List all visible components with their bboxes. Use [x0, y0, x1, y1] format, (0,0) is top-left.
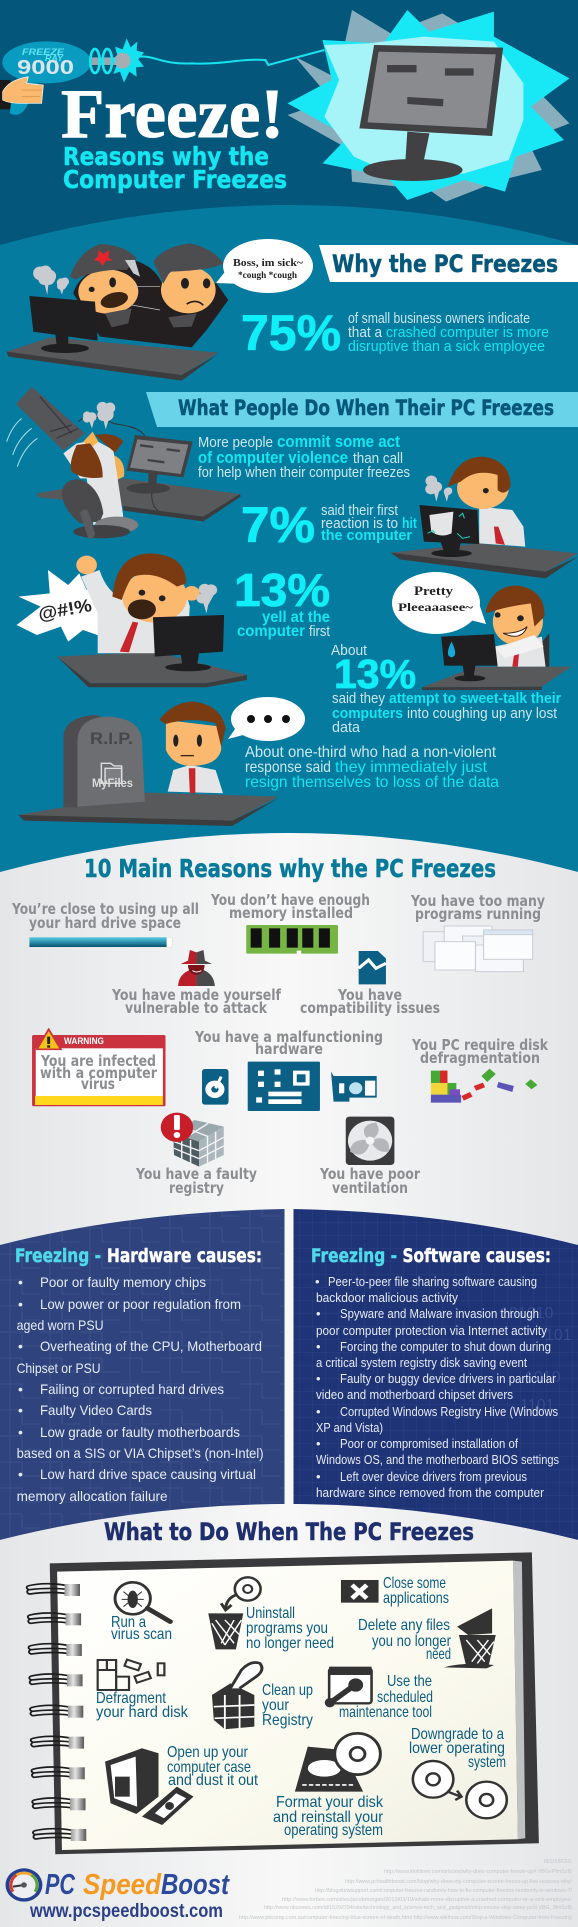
icon: frozen monitor with starburst	[288, 10, 569, 202]
list: software causes: •	[316, 1339, 321, 1354]
list: hardware causes: based on a SIS or VIA Chipset’s (non-Intel)	[17, 1445, 264, 1461]
reason: vulnerable to attack: You have made yourself	[111, 986, 281, 1004]
tip: delete files: Delete any files	[358, 1617, 450, 1634]
stat: 13% sweet-talk: About	[331, 642, 368, 659]
tip: format disk: Format your disk	[276, 1794, 384, 1811]
list: software causes: •	[316, 1436, 321, 1451]
reason: compatibility	[300, 951, 440, 1017]
text: resources	[239, 1859, 573, 1921]
text: gravestone labels: MyFiles	[92, 776, 133, 790]
reason: computer virus warning box	[32, 1029, 166, 1106]
speech bubble: Pretty Pleeaaasee	[392, 572, 486, 634]
heading: hardware: Freezing -	[15, 1245, 101, 1267]
list: software causes: Poor or compromised installation of	[340, 1436, 518, 1451]
tip: defragment: Defragment	[96, 1690, 166, 1707]
text: non-violent response	[245, 744, 499, 791]
text: resources: http://blogsitewsupport.com/computer-freezes-randomly-how-to-fix-computer-freezes-randomly-in-windows-7/	[315, 1888, 573, 1894]
reason: hard drive space: You’re close to using up all	[11, 900, 199, 918]
text: resources: http://www.nbcnews.com/id/15292794/site/technology_and_science-tech_and_gadgets/t/step-mouse-step-away-pc/#.VBG_3fmSzf8	[264, 1905, 572, 1911]
icon: freeze ray gun	[0, 38, 144, 115]
subtitle: Computer Freezes	[63, 165, 287, 194]
text: resources: http://www.pbcomp.com.au/computer-freezing-blue-screen-of-death.html http://www.wikihow.com/Stop-a-Windows-Computer-from-Freezing	[239, 1915, 572, 1921]
tip: close some applications	[341, 1575, 449, 1607]
decorative binary: 101	[545, 1327, 572, 1344]
list: software causes: •	[316, 1469, 321, 1484]
stat: 7% hit the computer: said their first	[321, 502, 399, 519]
speech bubble: Boss, im sick: Boss, im sick~	[233, 257, 303, 269]
text: non-violent response: About one-third who had a non-violent	[245, 744, 497, 761]
illustration: resigned person with gravestone	[18, 702, 278, 826]
list: software causes: Forcing the computer to shut down during	[340, 1339, 551, 1354]
tip: delete files: need	[426, 1646, 451, 1663]
notebook rings	[27, 1584, 86, 1841]
decorative binary	[500, 1305, 572, 1414]
tip: uninstall programs: no longer need	[246, 1635, 334, 1652]
list: hardware causes: aged worn PSU	[17, 1317, 104, 1333]
logo: PC SpeedBoost: www.pcspeedboost.com	[29, 1901, 223, 1922]
list: software causes: •	[315, 1274, 320, 1289]
reason: hard drive space: your hard drive space	[29, 914, 181, 932]
stat: 75% sick employee: of small business owners indicate	[348, 310, 530, 327]
list: software causes: hardware since removed from the computer	[316, 1485, 545, 1500]
tip: defragment: your hard disk	[96, 1704, 189, 1721]
tip: run a virus scan: virus scan	[111, 1626, 172, 1643]
reason: too many programs	[410, 892, 545, 972]
reason: too many programs: You have too many	[410, 892, 545, 910]
logo: PC SpeedBoost: PC	[45, 1869, 76, 1901]
list: software causes: •	[316, 1371, 321, 1386]
tip: clean registry: your	[262, 1697, 290, 1714]
list: hardware causes: Low power or poor regulation from	[40, 1296, 241, 1312]
stat: 7% hit the computer	[241, 497, 417, 553]
reason: malfunctioning hardware: hardware	[255, 1040, 323, 1058]
reason: poor ventilation: ventilation	[332, 1179, 408, 1197]
reason: compatibility: You have	[337, 986, 402, 1004]
stat: 75% sick employee: disruptive than a sick employee	[348, 338, 545, 355]
icon: registry cube with alert	[161, 1113, 224, 1167]
reason: memory	[210, 891, 370, 954]
title: Freeze!	[61, 76, 284, 153]
stat: 13% sweet-talk: computers	[332, 705, 403, 722]
text: gun label	[17, 47, 74, 79]
speech bubble: Boss, im sick	[216, 239, 313, 293]
tip: scheduled maintenance: maintenance tool	[339, 1704, 432, 1721]
speech bubble: silent dots	[228, 697, 305, 741]
list: hardware causes: •	[18, 1424, 23, 1440]
text: resources: http://www.pchealthboost.com/blog/why-does-my-computer-screen-freeze-up-five-reasons-why/	[345, 1879, 573, 1885]
decorative binary: 1101	[520, 1397, 555, 1414]
icon: graphics card	[331, 1072, 377, 1102]
list: software causes: •	[316, 1404, 321, 1419]
tip: clean registry: Clean up	[262, 1682, 313, 1699]
speech bubble: Pretty Pleeaaasee: Pretty	[414, 583, 454, 598]
heading banner: What People Do When Their PC Freezes	[146, 392, 578, 427]
list: software causes: XP and Vista)	[316, 1420, 383, 1435]
stat: 13% sweet-talk: attempt to sweet-talk their	[389, 690, 561, 707]
text: computer violence: commit some act	[277, 432, 400, 451]
text: gun label: RAY	[45, 54, 64, 63]
decorative binary: 1010	[525, 1369, 561, 1386]
icon: broken file	[359, 951, 386, 984]
subtitle	[63, 142, 287, 194]
logo: PC SpeedBoost	[6, 1868, 230, 1922]
list: hardware causes: Faulty Video Cards	[40, 1402, 152, 1418]
list: software causes	[315, 1274, 559, 1500]
notebook	[27, 1552, 539, 1854]
stat: 7% hit the computer: 7%	[241, 497, 315, 553]
tip: run a virus scan	[111, 1582, 172, 1643]
tip: delete files: you no longer	[372, 1633, 452, 1650]
stat: 13% yell at the computer: yell at the	[262, 609, 330, 626]
reason: vulnerable to attack: vulnerable to attack	[125, 999, 268, 1017]
reason: too many programs: programs running	[415, 905, 541, 923]
text: gun label: 9000	[17, 57, 74, 79]
list: hardware causes: Failing or corrupted hard drives	[40, 1381, 224, 1397]
heading: software: Freezing -	[311, 1245, 397, 1267]
stat: 13% yell at the computer: computer	[237, 623, 305, 640]
text: resources: RESOURCES:	[544, 1859, 572, 1865]
stat: 13% sweet-talk: into coughing up any lost	[407, 705, 558, 722]
stat: 13% yell at the computer: first	[309, 623, 331, 640]
tip: dust computer case: Open up your	[167, 1744, 249, 1761]
stat: 13% yell at the computer: 13%	[234, 564, 330, 616]
icon: speedometer	[6, 1868, 42, 1902]
reason: compatibility: compatibility issues	[300, 999, 440, 1017]
reason: malfunctioning hardware: You have a malfunctioning	[194, 1028, 383, 1046]
tip: run a virus scan: Run a	[111, 1614, 146, 1631]
tip: close some applications: Close some	[383, 1575, 446, 1592]
reason: poor ventilation: You have poor	[319, 1165, 420, 1183]
reason: vulnerable to attack	[111, 950, 281, 1017]
tip: downgrade operating system: system	[468, 1754, 506, 1771]
reason: disk defragmentation: defragmentation	[420, 1049, 540, 1067]
list: software causes: a critical system registry disk saving event	[316, 1355, 527, 1370]
logo: PC SpeedBoost: Boost	[161, 1869, 230, 1901]
decorative binary: 101010	[500, 1305, 553, 1322]
list: hardware causes: Overheating of the CPU, Motherboard	[40, 1338, 262, 1354]
tip: downgrade operating system	[409, 1726, 507, 1818]
tip: defragment	[96, 1660, 189, 1721]
list: software causes: •	[316, 1306, 321, 1321]
stat: 7% hit the computer: reaction is to	[321, 515, 398, 532]
tip: format disk: and reinstall your	[273, 1809, 384, 1826]
stat: 13% sweet-talk	[331, 642, 561, 736]
reason: memory: memory installed	[229, 904, 353, 922]
stat: 75% sick employee: 75%	[241, 305, 341, 361]
reason: computer virus warning box: WARNING	[64, 1036, 104, 1046]
list: hardware causes: •	[18, 1338, 23, 1354]
text: resources: http://www.forbes.com/sites/jacobmorgan/2013/03/19/whats-more-disruptive-a-crashed-computer-or-a-sick-employee/	[282, 1897, 573, 1903]
illustration: person hitting the monitor	[391, 457, 578, 578]
tip: uninstall programs: programs you	[246, 1620, 328, 1637]
icon: hacker	[178, 950, 215, 986]
list: hardware causes	[17, 1274, 264, 1504]
tip: scheduled maintenance	[325, 1667, 433, 1721]
stat: 13% sweet-talk: data	[332, 719, 361, 736]
illustration: person sweet-talking monitor	[422, 586, 571, 690]
text: swear bubble: @#!%	[37, 595, 93, 624]
list: software causes: backdoor malicious activity	[316, 1290, 458, 1305]
list: hardware causes: Chipset or PSU	[17, 1360, 101, 1376]
list: software causes: Left over device drivers from previous	[340, 1469, 527, 1484]
illustration: person yelling at monitor	[17, 553, 247, 687]
list: software causes: video and motherboard chipset drivers	[316, 1387, 513, 1402]
panel: hardware causes	[0, 1209, 284, 1540]
reason: faulty registry: You have a faulty	[135, 1165, 257, 1183]
stat: 13% sweet-talk: 13%	[334, 651, 416, 697]
reason: computer virus warning box: with a computer	[40, 1064, 158, 1082]
tip: clean registry: Registry	[262, 1712, 313, 1729]
list: hardware causes: Poor or faulty memory chips	[40, 1274, 206, 1290]
list: hardware causes: •	[18, 1381, 23, 1397]
icon: motherboard	[248, 1062, 320, 1111]
list: hardware causes: •	[18, 1402, 23, 1418]
reason: disk defragmentation: You PC require disk	[411, 1036, 549, 1054]
tip: dust computer case: and dust it out	[168, 1772, 258, 1789]
icon: hard drive	[202, 1069, 229, 1105]
reason: poor ventilation	[319, 1117, 420, 1197]
icon: RAM stick	[246, 925, 338, 954]
logo: PC SpeedBoost: Speed	[83, 1869, 162, 1901]
background: teal section	[0, 205, 578, 890]
reason: computer virus warning box: You are infected	[40, 1052, 156, 1070]
stat: 7% hit the computer: hit	[402, 515, 417, 532]
tip: downgrade operating system: lower operating	[409, 1740, 505, 1757]
text: resources: http://www.kioltitren.com/articles/why-does-computer-freeze-up#.VBGvPfmSzf8	[384, 1869, 572, 1875]
tip: uninstall programs: Uninstall	[246, 1605, 295, 1622]
list: hardware causes: •	[18, 1274, 23, 1290]
background: light section	[0, 833, 578, 1927]
heading: What to Do: What to Do When The PC Freezes	[104, 1518, 474, 1546]
list: software causes: Peer-to-peer file sharing software causing	[328, 1274, 537, 1289]
list: hardware causes: memory allocation failure	[17, 1488, 168, 1504]
subtitle: Reasons why the	[63, 142, 269, 171]
icon: defrag blocks	[431, 1069, 537, 1103]
stat: 75% sick employee: that a	[348, 324, 383, 341]
icon: progress bar	[29, 937, 172, 947]
tip: format disk	[273, 1733, 384, 1839]
text: computer violence: More people	[198, 434, 273, 451]
list: software causes: Spyware and Malware invasion through	[340, 1306, 539, 1321]
stat: 75% sick employee: crashed computer is more	[386, 324, 549, 341]
heading: hardware	[15, 1245, 262, 1267]
tip: format disk: operating system	[284, 1822, 383, 1839]
icon: cooling fan	[346, 1117, 394, 1165]
heading: hardware: Hardware causes:	[107, 1245, 262, 1267]
reason: computer virus warning box: virus	[81, 1075, 115, 1093]
list: hardware causes: •	[18, 1466, 23, 1482]
text: non-violent response: response said	[245, 759, 331, 776]
tip: downgrade operating system: Downgrade to a	[411, 1726, 504, 1743]
list: hardware causes: •	[18, 1296, 23, 1312]
stat: 75% sick employee	[241, 305, 549, 361]
text: computer violence: of computer violence	[198, 448, 348, 467]
light band over panels	[0, 1504, 578, 1560]
list: software causes: poor computer protection via Internet activity	[316, 1323, 547, 1338]
text: gun label: FREEZE	[22, 47, 65, 57]
text: computer violence: for help when their computer freezes	[198, 464, 410, 481]
list: software causes: Faulty or buggy device drivers in particular	[340, 1371, 557, 1386]
icon: freeze ray lightning	[138, 50, 324, 65]
text: computer violence	[198, 432, 410, 481]
speech bubble: Boss, im sick: *cough *cough	[238, 270, 297, 280]
tip: scheduled maintenance: Use the	[387, 1673, 432, 1690]
speech bubble: Pretty Pleeaaasee: Pleeaaasee~	[398, 600, 474, 614]
tip: uninstall programs	[208, 1577, 334, 1652]
illustration: angry boss and sick employee	[7, 243, 228, 381]
tip: dust computer case	[105, 1744, 258, 1825]
text: non-violent response: they immediately just	[335, 759, 488, 776]
stat: 13% yell at the computer	[234, 564, 331, 640]
icon: stacked windows	[423, 926, 533, 972]
tip: delete files	[358, 1608, 496, 1668]
tip: clean registry	[212, 1662, 313, 1729]
reason: faulty registry	[135, 1113, 257, 1197]
illustration: person throwing keyboard at monitor	[7, 387, 241, 539]
text: gravestone labels: R.I.P.	[90, 729, 133, 748]
panel: software causes	[294, 1209, 578, 1540]
list: hardware causes: Low grade or faulty motherboards	[40, 1424, 240, 1440]
tip: dust computer case: computer case	[167, 1759, 251, 1776]
reason: malfunctioning hardware	[194, 1028, 383, 1111]
tip: close some applications: applications	[383, 1590, 449, 1607]
list: hardware causes: Low hard drive space causing virtual	[40, 1466, 256, 1482]
text: gravestone labels	[90, 729, 133, 790]
text: computer violence: than call	[353, 450, 403, 467]
stat: 13% sweet-talk: said they	[332, 690, 385, 707]
reason: hard drive space	[11, 900, 199, 947]
stat: 7% hit the computer: the computer	[321, 527, 412, 544]
heading: software	[311, 1245, 551, 1267]
reason: disk defragmentation	[411, 1036, 549, 1103]
tip: scheduled maintenance: scheduled	[377, 1689, 433, 1706]
reason: memory: You don’t have enough	[210, 891, 370, 909]
title	[61, 76, 287, 194]
text: non-violent response: resign themselves to loss of the data	[245, 774, 499, 791]
reason: faulty registry: registry	[169, 1179, 224, 1197]
background: dark teal header	[0, 0, 578, 300]
